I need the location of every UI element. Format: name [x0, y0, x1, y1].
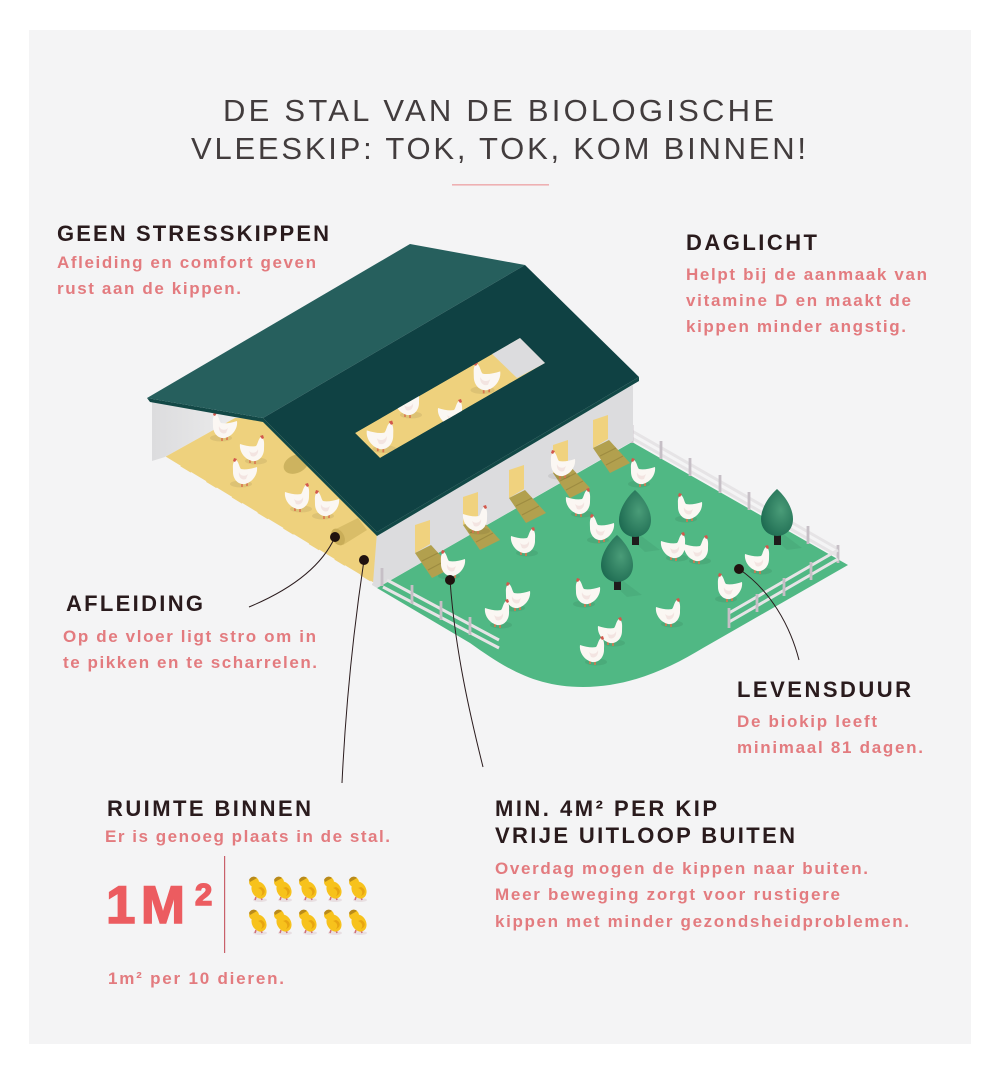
- text block: daglicht: [686, 230, 927, 336]
- text block: ruimte binnen: RUIMTE BINNEN: [107, 796, 311, 821]
- icon: tree: [601, 535, 642, 597]
- illustration: front fences: [382, 550, 838, 648]
- icons: ten chicks: [248, 877, 370, 935]
- big stat: 1 m2: 1M: [106, 876, 185, 935]
- text block: levensduur: LEVENSDUUR: [737, 677, 911, 702]
- illustration: barn walls: [152, 385, 633, 588]
- title: DE STAL VAN DE BIOLOGISCHE: [223, 93, 774, 128]
- text block: geen stresskippen: GEEN STRESSKIPPEN: [57, 221, 329, 246]
- text block: levensduur: [737, 677, 923, 757]
- text block: afleiding: [63, 591, 317, 672]
- text block: afleiding: AFLEIDING: [66, 591, 203, 616]
- illustration: barn roof: [147, 244, 639, 536]
- big stat: 1 m2: 2: [195, 877, 212, 912]
- text block: daglicht: kippen minder angstig.: [686, 317, 906, 336]
- icon: tree: [761, 489, 802, 550]
- text block: geen stresskippen: rust aan de kippen.: [57, 279, 241, 298]
- text block: daglicht: vitamine D en maakt de: [686, 291, 911, 310]
- text block: min 4m2 per kip: [495, 796, 909, 931]
- caption: per 10 dieren: 1m² per 10 dieren.: [108, 969, 284, 988]
- icon: straw bale: [328, 518, 367, 548]
- illustration: roof window: [355, 336, 547, 458]
- title: VLEESKIP: TOK, TOK, KOM BINNEN!: [191, 131, 806, 166]
- title: [191, 93, 806, 166]
- text block: daglicht: DAGLICHT: [686, 230, 818, 255]
- icon: tree: [619, 490, 660, 552]
- text block: levensduur: De biokip leeft: [737, 712, 877, 731]
- text block: min 4m2 per kip: Meer beweging zorgt voor rustigere: [495, 885, 840, 904]
- text block: daglicht: Helpt bij de aanmaak van: [686, 265, 927, 284]
- text block: geen stresskippen: [57, 221, 329, 298]
- text block: geen stresskippen: Afleiding en comfort geven: [57, 253, 316, 272]
- chickens in the outdoor run: [438, 450, 772, 666]
- text block: ruimte binnen: [105, 796, 390, 846]
- illustration: outdoor run grass: [377, 442, 848, 687]
- illustration: straw floor: [165, 418, 377, 583]
- text block: min 4m2 per kip: Overdag mogen de kippen naar buiten.: [495, 859, 868, 878]
- text block: afleiding: Op de vloer ligt stro om in: [63, 627, 316, 646]
- text block: min 4m2 per kip: MIN. 4M² PER KIP: [495, 796, 717, 821]
- text block: min 4m2 per kip: kippen met minder gezondsheidproblemen.: [495, 912, 909, 931]
- text block: ruimte binnen: Er is genoeg plaats in de stal.: [105, 827, 390, 846]
- text block: min 4m2 per kip: VRIJE UITLOOP BUITEN: [495, 823, 795, 848]
- chickens inside the barn: [210, 412, 339, 520]
- illustration: back fence: [632, 425, 838, 563]
- illustration: doors and ramps: [415, 415, 630, 578]
- text block: afleiding: te pikken en te scharrelen.: [63, 653, 317, 672]
- callout lines and dots: [249, 532, 799, 783]
- text block: levensduur: minimaal 81 dagen.: [737, 738, 923, 757]
